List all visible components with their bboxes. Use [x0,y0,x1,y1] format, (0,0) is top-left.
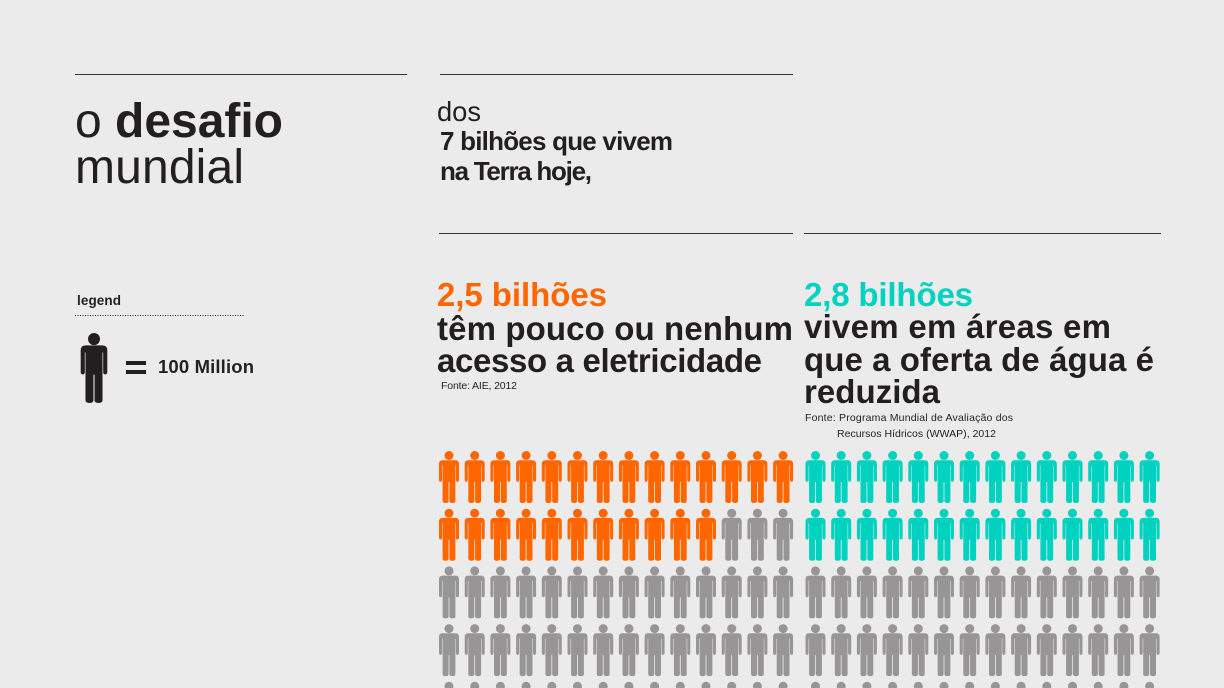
pictogram: water [806,451,1160,688]
electricity statistic [437,276,793,392]
electricity statistic: têm pouco ou nenhum [437,310,793,347]
legend [75,293,254,403]
legend: legend [77,293,121,308]
intro text [437,96,673,186]
water statistic: Fonte: Programa Mundial de Avaliação dos [805,412,1013,424]
water statistic: 2,8 bilhões [804,276,973,313]
water statistic: reduzida [804,373,941,410]
water statistic: vivem em áreas em [804,308,1111,345]
icon: person legend [81,333,107,403]
water statistic [804,276,1154,440]
intro text: dos [437,96,481,127]
title: mundial [75,141,244,194]
title [75,95,283,194]
water statistic: que a oferta de água é [804,341,1154,378]
electricity statistic: 2,5 bilhões [437,276,607,313]
icon: equals sign [126,361,146,374]
electricity statistic: acesso a eletricidade [437,342,762,379]
water statistic: Recursos Hídricos (WWAP), 2012 [837,428,996,440]
pictogram: electricity [439,451,793,688]
intro text: na Terra hoje, [440,156,592,186]
electricity statistic: Fonte: AIE, 2012 [441,380,517,392]
intro text: 7 bilhões que vivem [440,126,673,156]
legend value: 100 Million [158,356,254,377]
title: o desafio [75,95,283,148]
